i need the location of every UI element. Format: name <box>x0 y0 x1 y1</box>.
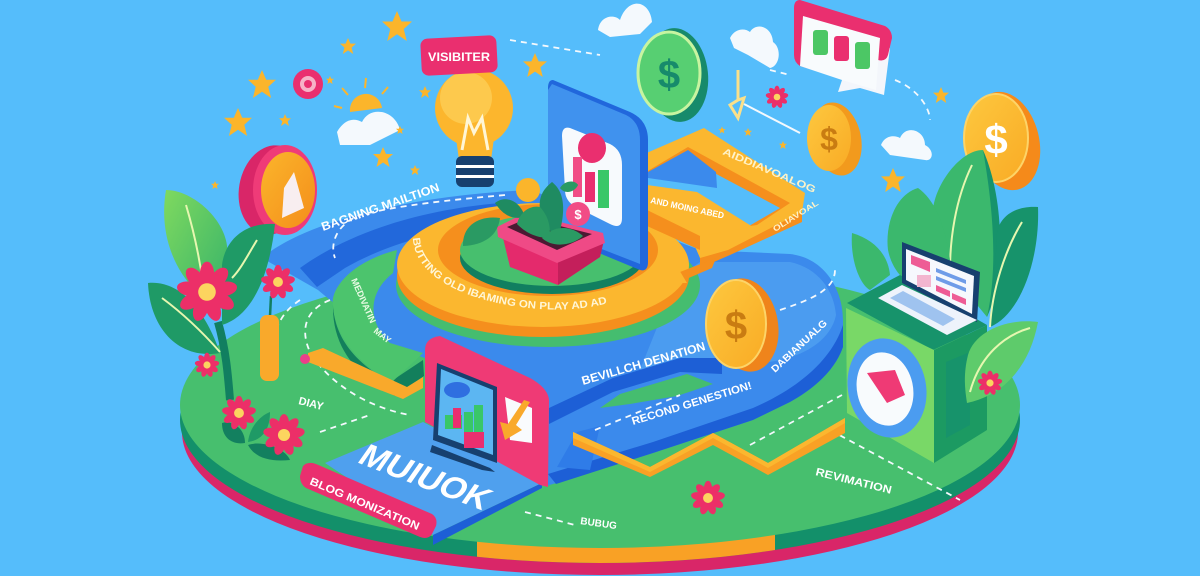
green box with laptop <box>838 242 987 463</box>
pink node <box>300 354 310 364</box>
platform orange rim segment <box>477 534 775 563</box>
connector lines <box>276 40 960 525</box>
arrow head <box>658 258 687 283</box>
far left leaf <box>852 233 890 290</box>
main flower <box>176 262 238 323</box>
ramp heading: MUIUOK <box>352 438 499 516</box>
laptop <box>878 242 980 335</box>
infographic stage <box>148 0 1040 575</box>
stem <box>218 322 230 400</box>
label: bevillch: BEVILLCH DENATION <box>580 339 707 388</box>
lower left flowers <box>221 396 305 460</box>
right leaf <box>990 207 1038 327</box>
small yellow coin <box>516 178 540 202</box>
road gap <box>600 374 713 408</box>
center disc side <box>460 222 644 294</box>
box side <box>934 325 987 463</box>
road upper band side <box>549 358 722 424</box>
right front leaf <box>965 321 1038 403</box>
inner band side <box>647 208 700 250</box>
plant in pink pot <box>463 178 605 285</box>
yellow ring <box>397 203 689 337</box>
pot body <box>503 238 604 285</box>
blue upper band and road <box>262 190 843 486</box>
tablet frame <box>433 363 497 463</box>
platform base <box>180 262 1020 575</box>
coin: road coin: $ <box>725 304 747 348</box>
road labels <box>319 180 830 428</box>
arrow shaft <box>680 258 716 280</box>
visibiter tag <box>420 35 498 76</box>
pink flower sky <box>765 86 789 109</box>
label: recond: RECOND GENESTION! <box>630 380 753 428</box>
text: left path label tail: MAY <box>372 326 393 345</box>
box front <box>846 308 934 463</box>
coin: green dollar <box>638 25 713 125</box>
tablet bars <box>445 415 462 429</box>
ring text: BUTTING OLD IBAMING ON PLAY AD AD <box>412 238 606 310</box>
play button <box>838 331 936 445</box>
pink target dot <box>293 69 323 99</box>
small flower <box>194 353 220 378</box>
right leaf <box>222 224 275 325</box>
blog monetization tag: BLOG MONIZATION <box>308 476 421 533</box>
spiral text right: OLIAVOAL <box>771 198 820 234</box>
small flower stem <box>270 296 271 316</box>
lightbulb <box>435 69 513 187</box>
label: bubug: BUBUG <box>580 516 618 532</box>
orange step line left <box>300 348 423 399</box>
road lower band side <box>548 325 843 484</box>
stars <box>211 11 949 192</box>
label: play: DIAY <box>297 395 325 413</box>
green curved ring on the left <box>333 250 424 396</box>
clouds <box>337 4 932 160</box>
left plant <box>148 190 296 400</box>
blog monetization tag <box>300 463 436 538</box>
outer band side <box>642 140 802 268</box>
platform top <box>180 262 1020 548</box>
right plant back leaves <box>852 150 1038 327</box>
platform dark rim <box>180 277 1020 563</box>
coin: yellow small: $ <box>820 121 838 157</box>
mid left leaf <box>887 188 950 290</box>
bottom flower <box>690 481 726 515</box>
spiral text inner: AND MOING ABED <box>650 195 725 221</box>
coin: road coin <box>706 273 786 377</box>
pot rim <box>497 213 605 263</box>
blue ramp <box>325 422 542 545</box>
speech bubble chart <box>794 0 892 95</box>
upper leaf <box>164 190 227 310</box>
label: revimation: REVIMATION <box>814 466 893 497</box>
tablet stand <box>430 445 495 472</box>
ring side <box>397 215 689 337</box>
pink panel with tablet <box>425 336 549 487</box>
left leaf <box>148 283 220 354</box>
chart card <box>562 128 622 226</box>
dark inner band <box>300 203 510 287</box>
visibiter tag: VISIBITER <box>428 50 490 64</box>
road lower band tip <box>557 426 600 470</box>
centre leaf <box>933 150 998 317</box>
box top <box>847 275 987 350</box>
label: dabianualg: DABIANUALG <box>770 318 830 375</box>
plant in pink pot: $ <box>574 207 582 222</box>
side flower <box>260 265 296 299</box>
text: left path label: MEDIVATIN <box>349 277 378 325</box>
white card <box>505 397 532 443</box>
green rim around the yellow ring <box>396 223 700 347</box>
coin: green dollar: $ <box>658 53 680 97</box>
inner band <box>647 185 753 236</box>
coin: yellow small <box>806 98 868 180</box>
pink coin left <box>232 140 317 240</box>
plant leaves <box>463 217 500 246</box>
orange zigzag line right <box>573 418 845 477</box>
inner blue strip <box>648 150 717 188</box>
laptop screen <box>902 242 980 322</box>
small pink coin <box>566 202 590 226</box>
yellow post <box>260 315 279 381</box>
coin: yellow large right: $ <box>984 116 1008 163</box>
laptop base <box>878 285 977 335</box>
road lighter surface <box>640 262 836 370</box>
outer band <box>642 128 805 258</box>
phone chart panel <box>548 80 648 270</box>
tablet screen <box>438 369 493 455</box>
sun <box>334 78 388 112</box>
yellow square spiral arrow <box>642 128 820 283</box>
spiral text top: AIDDIAVOALOG <box>721 147 817 196</box>
lightning arrow <box>730 70 800 133</box>
label: bagning: BAGNING MAILTION <box>319 180 441 234</box>
platform pink under-rim <box>182 289 1018 575</box>
ring surface <box>397 203 689 327</box>
coin: yellow large right <box>962 85 1050 197</box>
orange check arrow <box>500 400 530 440</box>
center disc <box>460 214 644 286</box>
ring hole wall <box>438 204 658 296</box>
